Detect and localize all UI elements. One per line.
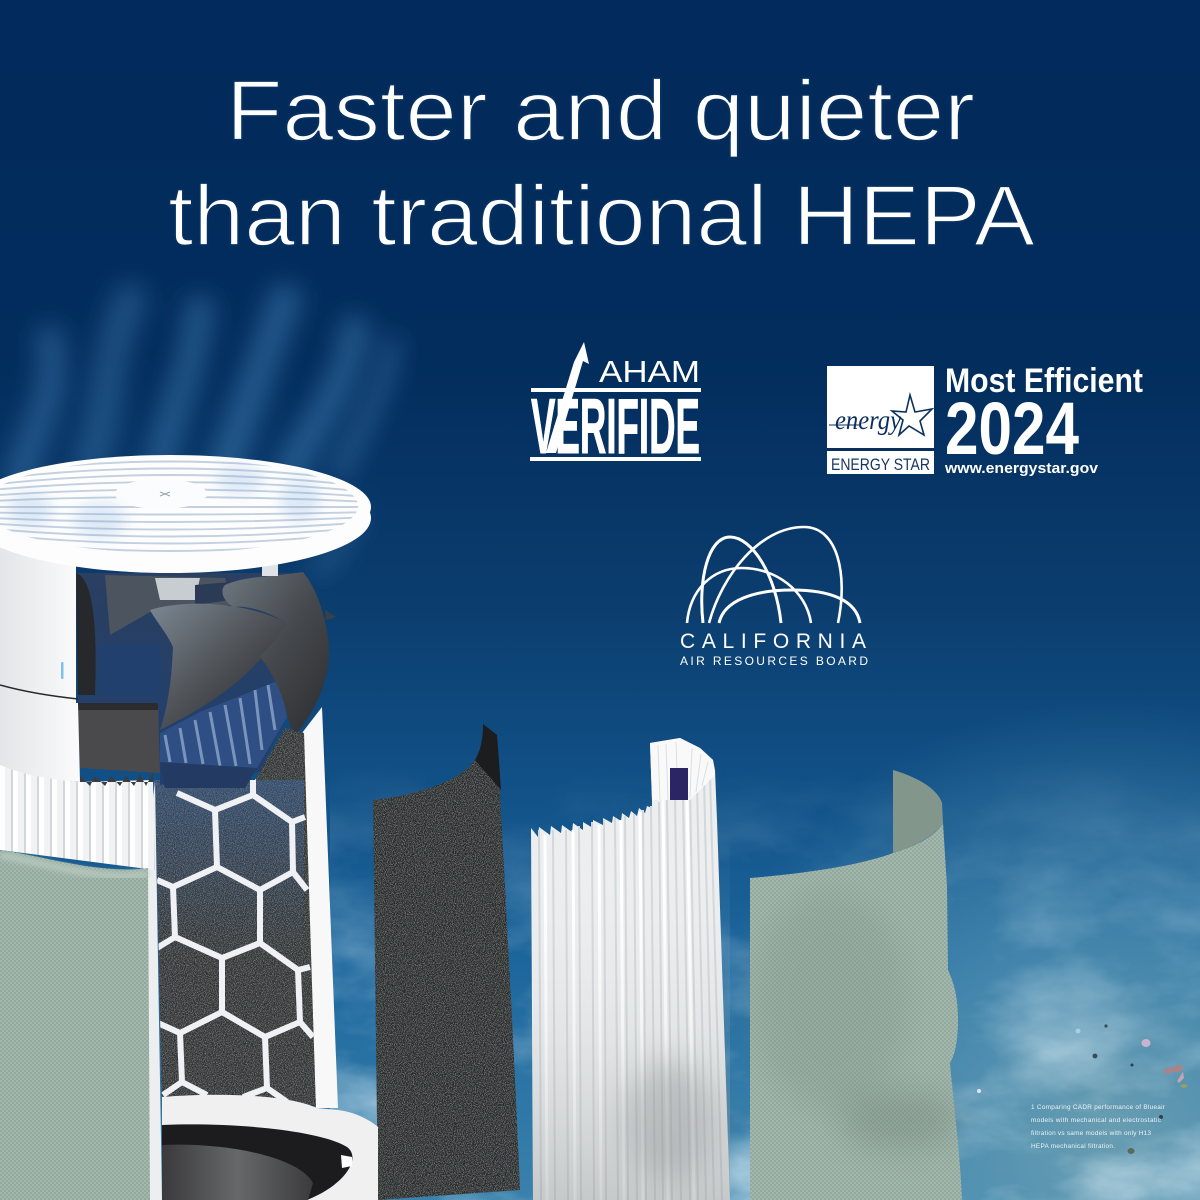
- dust particles: [977, 1024, 1188, 1154]
- year 2024: 2024: [945, 387, 1079, 470]
- cutaway interior: [76, 572, 336, 788]
- energy star box: energy: [835, 405, 901, 435]
- footnote: HEPA mechanical filtration.: [1031, 1143, 1115, 1150]
- green pre-filter on device: [0, 850, 150, 1200]
- pleat lines: [539, 775, 722, 1200]
- gray box: [77, 703, 160, 773]
- footnote: models with mechanical and electrostatic: [1031, 1117, 1162, 1124]
- logo: AHAM Verifide: [530, 342, 701, 470]
- CALIFORNIA wordmark: CALIFORNIA: [680, 630, 866, 653]
- text: VERIFIDE: [531, 382, 700, 470]
- title line 1: Faster and quieter: [226, 64, 975, 159]
- control panel: [115, 479, 207, 509]
- back pleats: [650, 738, 715, 800]
- fan hub: [105, 575, 232, 635]
- energy star box: ENERGY STAR: [831, 455, 930, 474]
- website: www.energystar.gov: [944, 460, 1099, 477]
- fan blade: [150, 604, 285, 730]
- left dark duct: [76, 573, 96, 695]
- footnote: [1031, 1104, 1166, 1150]
- title line 2: than traditional HEPA: [168, 169, 1035, 264]
- seam: [0, 685, 78, 699]
- title: [168, 64, 1035, 264]
- blue air haze: [8, 466, 320, 538]
- pleated filter on device: [0, 762, 155, 870]
- AHAM wordmark: AHAM: [599, 354, 700, 389]
- main white body: [0, 530, 80, 782]
- support posts: [262, 560, 278, 576]
- top grille disc: [0, 455, 371, 573]
- white outer frame: [302, 707, 338, 1108]
- Air Resources Board wordmark: AIR RESOURCES BOARD: [680, 654, 868, 668]
- energy star box: [827, 366, 934, 474]
- green pre-filter sheet: [750, 770, 962, 1200]
- check mark: [546, 342, 589, 453]
- air purifier cutaway: [0, 441, 378, 1200]
- background sky: [0, 437, 1200, 1200]
- inner column strip: [148, 780, 162, 1200]
- carbon honeycomb panel: [155, 728, 316, 1110]
- blue fins: [160, 680, 287, 768]
- logo: Energy Star Most Efficient 2024: [827, 362, 1143, 477]
- arcs: [687, 527, 860, 623]
- Most Efficient label: Most Efficient: [945, 362, 1143, 400]
- dark outer shell: [222, 572, 329, 733]
- logo: California Air Resources Board: [680, 527, 868, 668]
- footnote: 1 Comparing CADR performance of Blueair: [1031, 1104, 1166, 1111]
- carbon filter sheet: [373, 724, 520, 1200]
- brand label: [670, 768, 688, 800]
- indicator light: [61, 662, 64, 679]
- footnote: filtration vs same models with only H13: [1031, 1130, 1151, 1137]
- base ring: [162, 1095, 378, 1200]
- HEPA pleated filter sheet: [531, 738, 730, 1200]
- air wisps above purifier: [20, 300, 392, 570]
